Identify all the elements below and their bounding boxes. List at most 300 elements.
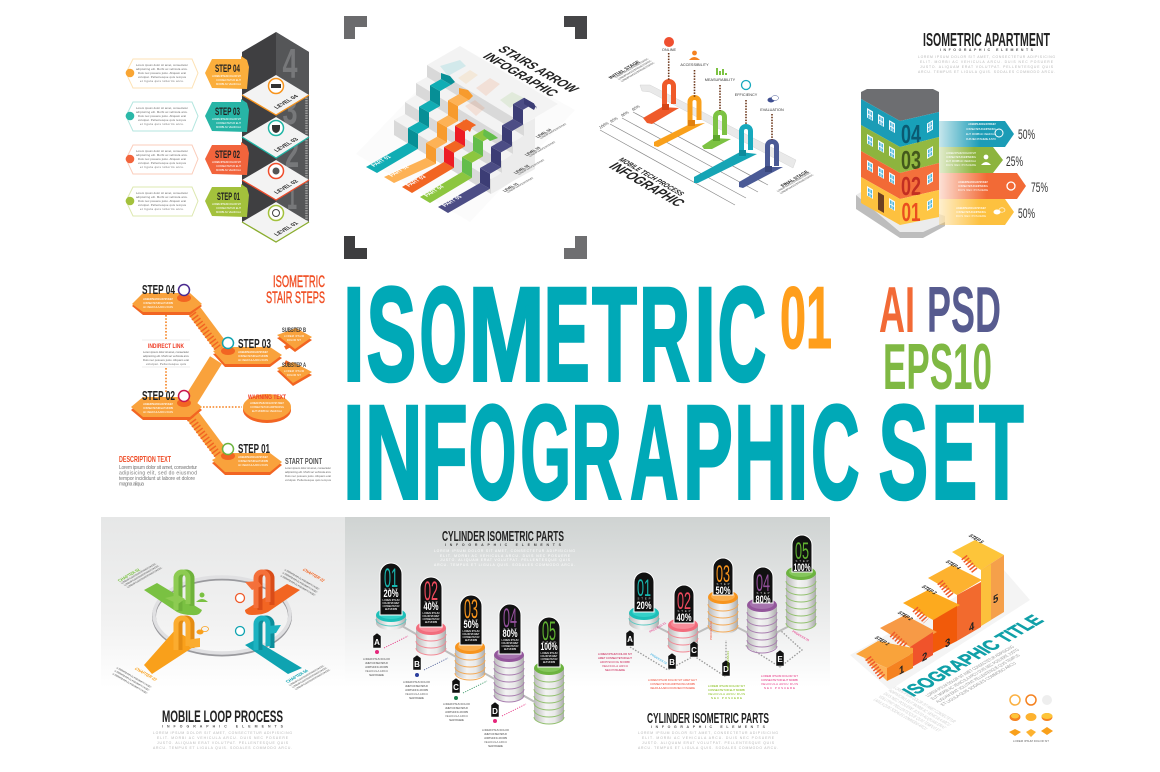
marker C: VEHICULA ARCU <box>445 714 468 718</box>
cylinder 05: STEP <box>542 640 556 644</box>
main title: isometric infographic set: S <box>366 260 416 410</box>
step 02 row: adipisicing elit. Morbi ac vehicula arcu. <box>136 153 188 157</box>
cylinder 05: STEP <box>796 559 809 563</box>
cylinder 01: 01 <box>384 563 398 593</box>
stair steps title: STAIR STEPS <box>266 288 325 307</box>
main title: isometric infographic set: C <box>718 260 766 410</box>
step 04 row: CONSECTETUR ELIT <box>216 78 241 82</box>
start point text: Duis nec posuere justo. Aliquam erat <box>285 474 331 478</box>
step 02 row: Lorem ipsum dolor sit amet, consectetur <box>136 149 188 153</box>
step 02 row: Duis nec posuere justo. Aliquam erat <box>138 157 186 161</box>
cylinder 04 <box>747 567 777 653</box>
cylinder 05 <box>534 616 564 724</box>
level labels: LEVEL 03 <box>524 146 542 157</box>
level 01 diamond: LEVEL 01 <box>274 221 301 237</box>
step 04 row: Duis nec posuere justo. Aliquam erat <box>138 71 186 75</box>
panel: cylinder isometric parts (right) <box>598 535 816 750</box>
green ribbon: part 04 <box>420 129 498 203</box>
cylinder heading: ARCU. TEMPUS ET LIGULA QUIS. SODALES COMMODO ARCU. <box>434 563 575 567</box>
panel: mobile tech process <box>598 37 815 209</box>
loop title: ARCU. TEMPUS ET LIGULA QUIS. SODALES COMMODO ARCU. <box>153 746 292 750</box>
main title: isometric infographic set: G <box>520 378 571 528</box>
cylinder heading: INFOGRAPHIC ELEMENTS <box>445 543 562 547</box>
markers A to E: B <box>669 658 675 667</box>
dotted links <box>166 315 242 407</box>
cylinder 03: 03 <box>716 561 730 588</box>
process tags: PROCESS 03 <box>709 621 713 640</box>
cylinder 02: 40% <box>676 612 692 624</box>
chapter labels: CHAPTER 01 <box>300 568 326 583</box>
description text: tempor incididunt ut labore et dolore <box>119 476 195 482</box>
main title: isometric infographic set: I <box>694 260 716 410</box>
step 03 row: STEP 03 <box>215 106 240 118</box>
step 02 row: STEP 02 <box>215 149 240 161</box>
substep A: LOREM IPSUM <box>284 369 304 373</box>
description block down-right <box>871 686 957 733</box>
step 02 row: volutpat. Pellentesque quis tempus <box>138 161 187 165</box>
step 03 row: LOREM IPSUM DOLOR SIT <box>212 117 241 121</box>
arch: efficiency: EFFICIENCY <box>735 93 758 97</box>
column 4: STEP 4 <box>943 560 962 571</box>
chapter labels: LOREM IPSUM DOLOR SIT AMET CONSEC <box>111 672 149 695</box>
column 1: 1 <box>899 663 904 678</box>
loop title: JUSTO. ALIQUAM ERAT VOLUTPAT. PELLENTESQUE QUIS <box>157 741 289 745</box>
step 03 row: Lorem ipsum dolor sit amet, consectetur <box>136 106 188 110</box>
cylinder 01: 20% <box>384 588 399 600</box>
step 01 platform <box>212 441 282 475</box>
arrow banner 04: LOREM IPSUM DOLOR SIT AMET <box>968 122 996 126</box>
main title: isometric infographic set: E <box>544 260 590 410</box>
main title: isometric infographic set: I <box>343 260 364 410</box>
marker descriptions: AMET CONSECTETUR ELIT <box>598 656 632 660</box>
description text: Lorem ipsum dolor sit amet, consectetur <box>119 465 197 471</box>
column 3: STEP 3 <box>919 585 938 596</box>
marker D: ADIPISICING MORBI <box>484 736 507 740</box>
arrow banner 01 <box>939 199 1035 225</box>
marker D: LOREM IPSUM DOLOR <box>482 728 509 732</box>
step 04 platform <box>132 282 202 315</box>
marker D <box>482 702 526 748</box>
guide lines <box>600 112 768 205</box>
loop icons <box>196 592 244 636</box>
marker D: D <box>492 707 498 716</box>
isographic title: ISOGRAPHIC TITLE <box>898 612 1049 700</box>
right cylinder title: LOREM IPSUM DOLOR SIT AMET, CONSECTETUR ADIPISICING <box>638 731 778 735</box>
faint floor shadow <box>356 46 575 222</box>
column 1 <box>856 636 913 681</box>
level labels <box>502 122 568 194</box>
cylinder 03: 50% <box>716 585 731 597</box>
marker descriptions: LOREM IPSUM DOLOR SIT <box>708 684 745 688</box>
green chapter strip <box>144 583 202 615</box>
floor 01: 01 <box>902 197 920 227</box>
step 04 row: MORBI AC VEHICULA <box>216 82 241 86</box>
cylinder heading: LOREM IPSUM DOLOR SIT AMET, CONSECTETUR ADIPISICING <box>434 549 575 553</box>
percent labels: 90% <box>620 109 630 118</box>
main title: isometric infographic set: P <box>683 378 733 528</box>
substep A <box>277 362 312 386</box>
chapter labels: LOREM IPSUM DOLOR SIT AMET CONSEC <box>290 666 329 689</box>
chapter labels: LOREM IPSUM DOLOR SIT AMET CONSEC <box>281 571 319 594</box>
red floor arrow <box>643 107 679 124</box>
marker descriptions: LOREM IPSUM DOLOR SIT AMET ELIT <box>648 678 697 682</box>
arrow banner 03: LOREM IPSUM DOLOR SIT <box>946 151 976 155</box>
description block up-right <box>925 645 1022 707</box>
warning ellipse: WARNING TEXT <box>248 394 286 401</box>
main title: isometric infographic set: T <box>592 260 637 410</box>
step 04 platform: STEP 04 <box>142 282 175 297</box>
process tags: PROCESS 05 <box>792 629 810 642</box>
green arch <box>165 572 192 611</box>
arrow banner 03: ELIT. MORBI AC VEHICULA <box>946 159 976 163</box>
stage labels: LOREM IPSUM DOLOR SIT AMET CONSEC <box>619 61 656 83</box>
panel: tower steps infographic: 1 <box>287 171 297 218</box>
marker descriptions: VEHICULA ARCU <box>602 664 628 668</box>
chapter labels: LOREM IPSUM DOLOR SIT AMET CONSEC <box>287 664 326 687</box>
arrow banner 03: 25% <box>1006 153 1023 169</box>
step 01 platform: STEP 01 <box>238 441 270 456</box>
level 03 diamond: LEVEL 03 <box>274 137 301 153</box>
marker A: ADIPISICING MORBI <box>365 665 388 669</box>
cylinder 05: LOREM IPSUM <box>540 651 558 655</box>
loop title: LOREM IPSUM DOLOR SIT AMET, CONSECTETUR ADIPISICING <box>153 731 292 735</box>
arch: accessibility: ACCESSIBILITY <box>680 63 709 67</box>
right cylinder title: ARCU. TEMPUS ET LIGULA QUIS. SODALES COMMODO ARCU. <box>638 746 778 750</box>
step 04 row: et ligula quis lobortis arcu. <box>140 79 184 83</box>
step 03 row: volutpat. Pellentesque quis tempus <box>138 118 187 122</box>
step 04 row: Lorem ipsum dolor sit amet, consectetur <box>136 63 188 67</box>
arrow banner 01: 50% <box>1018 205 1035 221</box>
marker D: AMET CONSECTETUR <box>484 732 507 736</box>
right cylinder title: INFOGRAPHIC ELEMENTS <box>651 725 766 729</box>
cylinder 05 <box>786 535 816 630</box>
panel: cylinder isometric parts (left) <box>363 528 575 748</box>
title: stairs arrow infographic: STAIRS ARROW <box>494 43 583 95</box>
corner brackets <box>344 16 587 259</box>
cylinder 02: CONSECTETUR <box>422 617 440 621</box>
description block down-right: ADIPISICING ELIT MORBI AC VEHICULA ARCU <box>886 689 952 727</box>
cylinder 03: 03 <box>464 594 478 624</box>
apartment title: ARCU. TEMPUS ET LIGULA QUIS. SODALES COMMODO ARCU. <box>918 70 1055 74</box>
connector bars <box>644 620 801 640</box>
floor 03: 03 <box>901 145 921 175</box>
arrow banner 02: DUIS NEC POSUERE <box>958 188 988 192</box>
marker B: ADIPISICING MORBI <box>405 688 428 692</box>
dark tower <box>242 32 309 242</box>
chapter labels: CHAPTER 03 <box>132 667 158 682</box>
floor 02 <box>861 151 939 201</box>
marker C: NEC POSUERE <box>449 718 464 722</box>
warning ellipse: LOREM IPSUM DOLOR SIT AMET <box>250 401 284 405</box>
process tags: PROCESS 04 <box>726 651 730 670</box>
marker C: AMET CONSECTETUR <box>445 706 468 710</box>
arch: evaluation <box>760 96 784 173</box>
cylinder heading: JUSTO. ALIQUAM ERAT VOLUTPAT. PELLENTESQUE QUIS <box>440 558 571 562</box>
step 02 row: CONSECTETUR ELIT <box>216 164 241 168</box>
marker descriptions: VEHICULA ARCU DUIS <box>761 682 798 686</box>
step 01 row: LOREM IPSUM DOLOR SIT <box>212 202 241 206</box>
markers A to E <box>626 630 784 676</box>
step 02 row <box>126 142 249 175</box>
panel: tower steps infographic: 3 <box>282 86 298 133</box>
marker C <box>443 678 487 722</box>
column 4: 4 <box>969 619 975 635</box>
marker descriptions: VEHICULA ARCU DUIS NEC POSUERE <box>650 686 695 690</box>
arrow banner 01: CONSECTETUR ADIPISICING <box>956 210 986 214</box>
cylinder 03: STEP <box>464 618 478 622</box>
cylinder 05: 100% <box>540 641 558 653</box>
cylinder 04: 80% <box>502 628 518 640</box>
orange ribbon: part 02: PART 02 <box>389 165 412 178</box>
main title: isometric infographic set: I <box>343 378 364 528</box>
faded reflections on top row <box>440 60 524 116</box>
chapter labels: LOREM IPSUM DOLOR SIT AMET CONSEC <box>113 669 151 692</box>
floor 02: 02 <box>901 171 921 201</box>
loop title <box>153 707 292 750</box>
step 03 row: et ligula quis lobortis arcu. <box>140 122 184 126</box>
step 01 row: et ligula quis lobortis arcu. <box>140 207 184 211</box>
markers A to E: C <box>691 646 697 655</box>
level 04 diamond: LEVEL 04 <box>274 94 301 110</box>
floor 01 <box>861 177 939 227</box>
column 5: STEP 5 <box>966 534 985 545</box>
level labels: LOREM IPSUM DOLOR SIT AMET <box>538 122 568 140</box>
cylinder 02: STEP <box>424 600 438 604</box>
step 04 platform: AC VEHICULA ARCU DUIS <box>143 305 173 309</box>
floor 03 <box>861 125 939 175</box>
panel: mobile loop process <box>111 562 332 750</box>
markers A to E: E <box>777 655 783 664</box>
main title: isometric infographic set <box>343 260 1024 528</box>
orange chapter strip <box>144 630 198 674</box>
step 01 row: CONSECTETUR ELIT <box>216 206 241 210</box>
marker descriptions: NEC POSUERE <box>605 668 625 672</box>
marker A: AMET CONSECTETUR <box>365 661 388 665</box>
marker B <box>403 655 448 700</box>
indigo ribbon: part 05: PART 05 <box>442 195 465 208</box>
arrow banner 02: CONSECTETUR ADIPISICING <box>958 184 988 188</box>
cylinder 04: ELIT MORBI <box>504 647 516 651</box>
arrow banner 01: LOREM IPSUM DOLOR SIT AMET <box>956 206 986 210</box>
indirect link text: Lorem ipsum dolor sit amet, consectetur <box>143 350 189 354</box>
cylinder 02: STEP <box>678 609 691 613</box>
chapter labels: LOREM IPSUM DOLOR SIT AMET CONSEC <box>122 564 161 587</box>
chapter labels: LOREM IPSUM DOLOR SIT AMET CONSEC <box>279 574 317 597</box>
panel: isometric stair steps <box>119 272 332 488</box>
step 01 row: Duis nec posuere justo. Aliquam erat <box>138 199 186 203</box>
stage labels: INITIAL STAGE <box>608 60 643 80</box>
arrow banner 04: 50% <box>1018 126 1035 142</box>
cylinder 04: 04 <box>756 570 770 597</box>
cylinder 03: 50% <box>464 619 479 631</box>
cylinder 04: CONSECTETUR <box>502 644 519 648</box>
column 1: STEP 1 <box>872 636 891 647</box>
marker A <box>363 633 408 677</box>
cylinder 05: ELIT MORBI <box>543 660 555 664</box>
marker descriptions: LOREM IPSUM DOLOR SIT <box>761 674 798 678</box>
marker descriptions: CONSECTETUR ADIPISICING MORBI <box>650 682 695 686</box>
chapter labels: LOREM IPSUM DOLOR SIT AMET CONSEC <box>293 668 332 691</box>
substep B: DOLOR SIT <box>287 338 301 342</box>
icon set: LOREM IPSUM DOLOR SIT <box>1013 739 1049 743</box>
step 02 platform: LOREM IPSUM DOLOR SIT AMET <box>143 402 173 406</box>
cylinder 02 <box>668 585 698 652</box>
right cylinder title: JUSTO. ALIQUAM ERAT VOLUTPAT. PELLENTESQUE QUIS <box>642 741 775 745</box>
loop title: INFOGRAPHIC ELEMENTS <box>162 724 284 728</box>
floor 04: 04 <box>901 119 921 149</box>
start point text: Lorem ipsum dolor sit amet, consectetur <box>285 466 331 470</box>
cylinder 02: 40% <box>424 601 439 613</box>
cylinder 02: ELIT MORBI <box>425 620 437 624</box>
chapter labels <box>111 562 332 694</box>
cylinder 05: 05 <box>542 616 556 646</box>
main title: isometric infographic set: T <box>979 378 1024 528</box>
red ribbon: part 03 <box>402 119 476 193</box>
cylinder 01 <box>629 572 659 630</box>
percent labels <box>598 103 641 130</box>
cylinder 04 <box>494 603 524 702</box>
process dotted network <box>630 630 802 677</box>
substep B: SUBSTEP B <box>282 327 306 334</box>
main title: isometric infographic set: S <box>878 378 928 528</box>
panel: stairs arrow infographic <box>344 16 587 259</box>
warning ellipse: ELIT MORBI AC VEHICULA <box>252 409 282 413</box>
background: loop panel <box>101 517 345 702</box>
step 01 row: STEP 01 <box>217 191 240 203</box>
arrow banner 04: CONSECTETUR ADIPISICING <box>966 127 996 131</box>
marker A: A <box>374 638 380 647</box>
arch: accessibility <box>680 51 709 127</box>
orange ribbon: part 02 <box>384 88 473 183</box>
stage labels: LOREM IPSUM DOLOR SIT AMET CONSEC <box>616 59 653 81</box>
step 03 row: adipisicing elit. Morbi ac vehicula arcu. <box>136 110 188 114</box>
chapter labels: LOREM IPSUM DOLOR SIT AMET CONSEC <box>119 562 158 585</box>
stage labels: LOREM IPSUM DOLOR SIT AMET CONSEC <box>775 171 812 193</box>
level labels: LOREM IPSUM DOLOR SIT AMET <box>505 176 535 194</box>
title: mobile tech process infographic: INFOGRAPHIC <box>605 160 689 209</box>
chapter labels: LOREM IPSUM DOLOR SIT AMET CONSEC <box>283 568 321 591</box>
right cylinder title: CYLINDER ISOMETRIC PARTS <box>647 710 769 727</box>
step 01 row: volutpat. Pellentesque quis tempus <box>138 203 187 207</box>
percent labels: 100% <box>598 120 610 130</box>
description block up-right: ET LIGULA QUIS SODALES COMMODO ARCU <box>940 661 1019 707</box>
panel: tower steps infographic: 2 <box>285 129 299 176</box>
cylinder 01: 01 <box>637 575 651 602</box>
step 04 row: adipisicing elit. Morbi ac vehicula arcu. <box>136 67 188 71</box>
column 5 <box>952 534 1004 626</box>
description text: adipisicing elit, sed do eiusmod <box>119 470 197 476</box>
marker B: NEC POSUERE <box>409 696 424 700</box>
percent labels: 95% <box>609 115 619 124</box>
step 03 row: CONSECTETUR ELIT <box>216 121 241 125</box>
cylinder 05: DOLOR SIT AMET <box>540 654 558 658</box>
apartment title: INFOGRAPHIC ELEMENTS <box>940 48 1034 52</box>
step 01 row: Lorem ipsum dolor sit amet, consectetur <box>136 191 188 195</box>
step 04 row: LOREM IPSUM DOLOR SIT <box>212 74 241 78</box>
cylinder 03: DOLOR SIT AMET <box>462 632 480 636</box>
cylinder 03: LOREM IPSUM <box>462 629 480 633</box>
cylinder 04: STEP <box>504 627 517 631</box>
marker descriptions: LOREM IPSUM DOLOR SIT <box>598 652 632 656</box>
main title: isometric infographic set: F <box>421 378 468 528</box>
marker A: LOREM IPSUM DOLOR <box>363 657 390 661</box>
step 01 platform: LOREM IPSUM DOLOR SIT AMET <box>238 455 268 459</box>
stage labels: FINAL STAGE <box>780 170 811 188</box>
arrow banner 02: LOREM IPSUM DOLOR SIT AMET <box>958 180 988 184</box>
level 01 diamond <box>242 202 309 242</box>
green floor arrow <box>702 138 731 149</box>
step 02 row: et ligula quis lobortis arcu. <box>140 165 184 169</box>
panel: tower steps infographic: 4 <box>282 40 298 87</box>
step 03 row <box>126 99 249 132</box>
step 03 platform: AC VEHICULA ARCU DUIS <box>238 358 268 362</box>
red arch <box>245 572 272 610</box>
cylinder 01: 20% <box>636 600 652 612</box>
arrow banner 01: DUIS NEC POSUERE <box>956 214 986 218</box>
cylinder 04: STEP <box>756 591 770 595</box>
chapter labels: CHAPTER 02 <box>117 568 143 583</box>
loop title: MOBILE LOOP PROCESS <box>162 707 283 726</box>
stair steps title <box>266 272 325 307</box>
description block down-right: LIGULA QUIS SODALES COMMODO ARCU <box>871 698 929 731</box>
step 02 platform <box>131 388 202 420</box>
start point text: START POINT <box>285 457 322 466</box>
teal chapter strip <box>245 640 302 674</box>
stage labels: LOREM IPSUM DOLOR SIT AMET CONSEC <box>778 173 815 195</box>
cylinder 03: CONSECTETUR <box>462 635 480 639</box>
title: stairs arrow infographic: INFOGRAPHIC <box>479 50 563 99</box>
arrow banner 03: CONSECTETUR ADIPISICING <box>946 155 976 159</box>
cylinder 01: CONSECTETUR <box>382 604 400 608</box>
description block up-right: ELIT MORBI AC VEHICULA ARCU DUIS NEC POSUERE JUSTO <box>930 648 1021 701</box>
markers A to E: A <box>627 635 633 644</box>
level labels: LEVEL 01 <box>502 182 520 193</box>
cylinder 03: ELIT MORBI <box>465 638 477 642</box>
arch: online: ONLINE <box>662 48 677 52</box>
formats: EPS10 <box>883 330 992 403</box>
warning ellipse: CONSECTETUR ADIPISICING <box>250 405 284 409</box>
warning ellipse <box>243 394 291 423</box>
cylinder 01: ELIT MORBI <box>385 607 397 611</box>
background: cylinder panels <box>345 517 830 702</box>
level 04 diamond <box>242 75 309 115</box>
marker descriptions: NEC POSUERE <box>764 686 795 690</box>
main title: isometric infographic set: M <box>468 260 545 410</box>
marker A: VEHICULA ARCU <box>365 669 388 673</box>
main title: isometric infographic set: E <box>932 378 977 528</box>
red ribbon: part 03: PART 03 <box>406 175 429 188</box>
step 03 row: Duis nec posuere justo. Aliquam erat <box>138 114 186 118</box>
arrow banner 02 <box>939 173 1048 199</box>
step 01 row <box>126 184 249 217</box>
step 01 platform: AC VEHICULA ARCU DUIS <box>238 463 268 467</box>
start point text: volutpat. Pellentesque quis tempus <box>285 478 332 482</box>
indigo ribbon: part 05 <box>438 98 537 213</box>
cylinder 04: 04 <box>503 603 517 633</box>
level labels: LOREM IPSUM DOLOR SIT AMET <box>527 140 557 158</box>
cylinder 03: STEP <box>716 582 730 586</box>
panel: isographic title chart <box>850 534 1053 743</box>
cylinder 05: 05 <box>795 538 809 565</box>
step 04 row <box>126 56 249 89</box>
marker descriptions: ADIPISICING MORBI <box>600 660 630 664</box>
indirect link text: INDIRECT LINK <box>148 343 184 350</box>
cylinder 02: DOLOR SIT AMET <box>422 614 440 618</box>
stage labels <box>608 57 815 195</box>
column 2: 2 <box>922 650 927 665</box>
arrow banner 04 <box>939 121 1035 147</box>
floor 04 <box>861 99 939 149</box>
